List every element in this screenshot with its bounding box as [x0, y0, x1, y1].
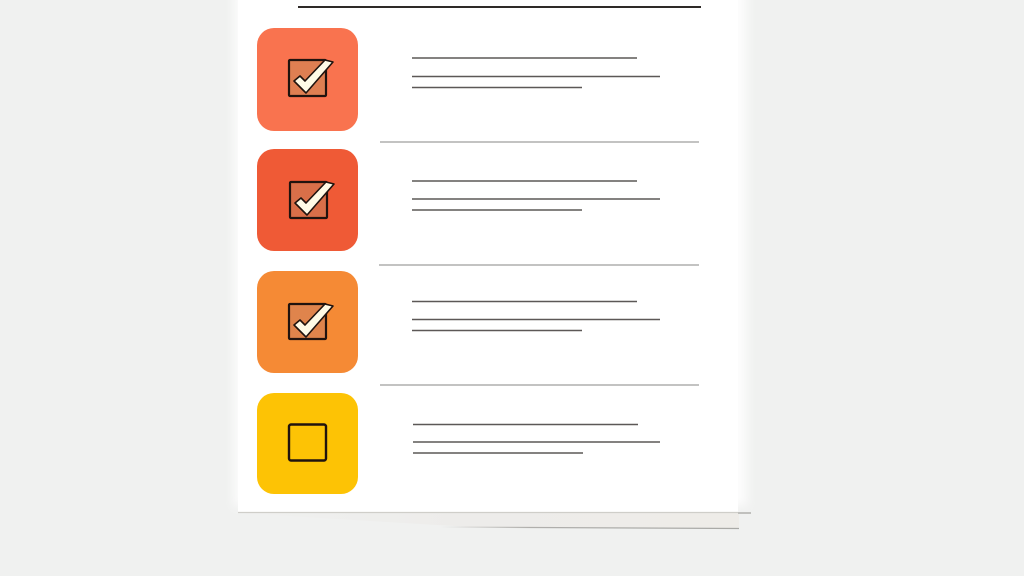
row 4: unchecked item [257, 393, 660, 494]
text lines [412, 302, 660, 330]
back sheets of paper [238, 512, 751, 528]
icon: orange tile with checked box [257, 271, 358, 373]
row 2: checked item [257, 149, 660, 251]
title rule [298, 6, 701, 8]
icon: orange-coral tile with checked box [257, 28, 358, 131]
divider 2 [379, 264, 699, 266]
divider 3 [380, 384, 699, 386]
text lines [413, 424, 660, 453]
text lines [412, 58, 660, 88]
icon: yellow tile with empty box [257, 393, 358, 494]
text lines [412, 181, 660, 210]
row 1: checked item [257, 28, 660, 131]
divider 1 [380, 141, 699, 143]
icon: red-orange tile with checked box [257, 149, 358, 251]
row 3: checked item [257, 271, 660, 373]
paper shadow glow [234, 0, 747, 506]
paper sheet [238, 0, 738, 512]
